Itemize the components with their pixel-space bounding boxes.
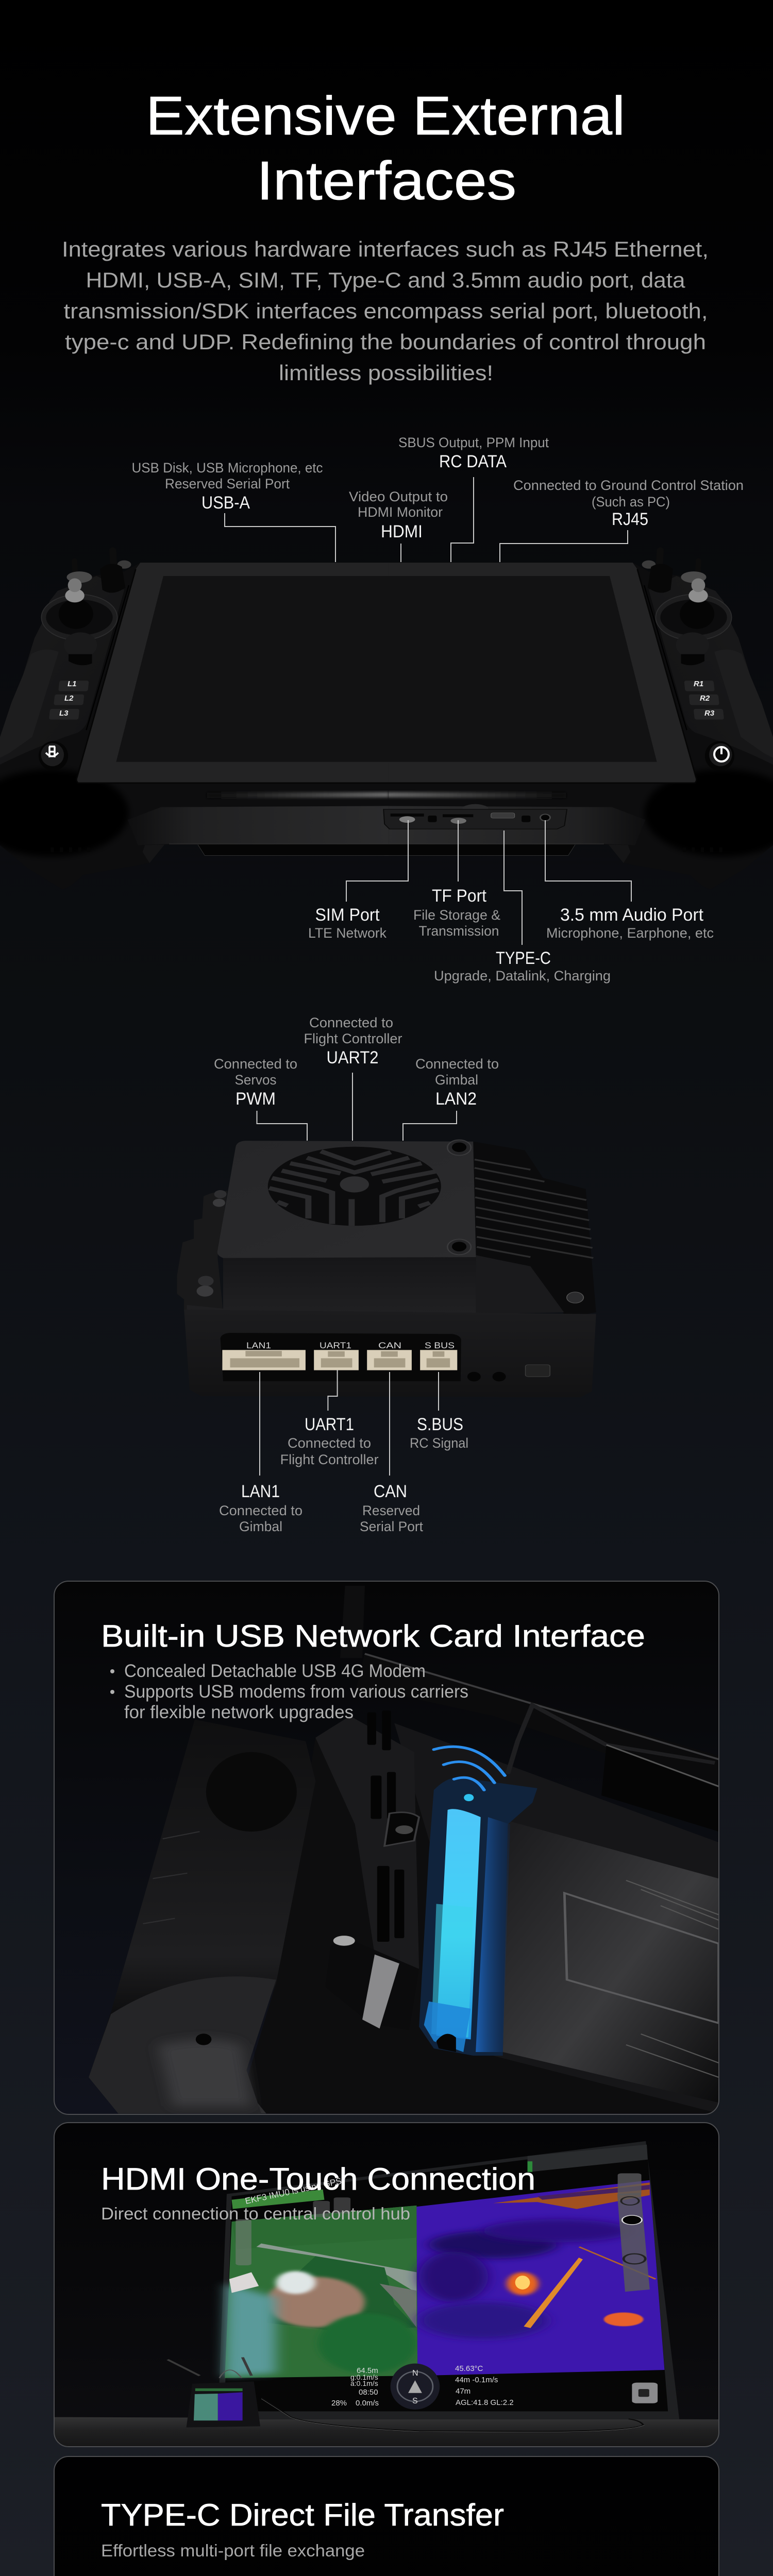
callout: TYPE-C: TYPE-C [496, 948, 551, 968]
callout: TF Port: File Storage & [413, 907, 500, 923]
callout: UART1: Connected to [288, 1435, 371, 1451]
connector labels: CAN [378, 1341, 401, 1350]
monitor HUD readouts: 47m [456, 2387, 470, 2396]
monitor HUD readouts: EKF3 IMU0 is using GPS [244, 2176, 343, 2206]
title: Extensive External [146, 86, 625, 146]
connector sockets [222, 1350, 550, 1381]
callout: TYPE-C: Upgrade, Datalink, Charging [434, 968, 611, 984]
intro paragraph: limitless possibilities! [279, 361, 493, 385]
controller button labels: L3 [59, 709, 69, 718]
panel subtext: Direct connection to central control hub [101, 2204, 410, 2223]
connector labels: S BUS [425, 1341, 455, 1350]
intro paragraph [62, 237, 709, 385]
callout: S.BUS: S.BUS [417, 1415, 463, 1434]
controller illustration [0, 547, 773, 889]
monitor HUD readouts: 0.0m/s [356, 2399, 379, 2408]
callout: HDMI [349, 489, 448, 562]
callout: HDMI: HDMI Monitor [358, 504, 443, 520]
callout: CAN [360, 1372, 423, 1534]
callout: S.BUS: RC Signal [410, 1435, 468, 1451]
callout: SIM Port: LTE Network [308, 925, 386, 941]
monitor HUD readouts: 45.63°C [455, 2364, 483, 2373]
callout: SIM Port: SIM Port [315, 905, 380, 925]
callout: HDMI: HDMI [381, 522, 423, 541]
callout: S.BUS [410, 1372, 468, 1451]
icon: home button [46, 747, 58, 757]
intro paragraph: transmission/SDK interfaces encompass serial port, bluetooth, [64, 299, 708, 323]
flight module illustration [177, 1140, 596, 1397]
controller button labels: R2 [700, 694, 710, 703]
panel heading: Built-in USB Network Card Interface [101, 1619, 645, 1653]
controller button labels: L1 [68, 680, 77, 688]
controller button labels: R3 [704, 709, 715, 718]
controller button labels: R1 [694, 680, 703, 688]
callout: LAN2: Connected to [415, 1056, 499, 1072]
callout: UART2: Connected to [309, 1015, 393, 1030]
callout: HDMI: Video Output to [349, 489, 448, 504]
callout: PWM: PWM [236, 1089, 276, 1109]
connector labels: LAN1 [246, 1341, 271, 1350]
callout: LAN2: LAN2 [435, 1089, 477, 1109]
callout: LAN1: Connected to [219, 1503, 303, 1518]
callout: CAN: CAN [374, 1482, 407, 1501]
bullet list: Concealed Detachable USB 4G Modem [124, 1661, 426, 1681]
callout: UART2 [304, 1015, 402, 1141]
intro paragraph: type-c and UDP. Redefining the boundaries of control through [65, 330, 706, 354]
monitor HUD readouts: 44m -0.1m/s [455, 2376, 498, 2384]
controller button labels [59, 680, 715, 718]
panel subtext: Effortless multi-port file exchange [101, 2541, 365, 2560]
callout: RC DATA [398, 435, 549, 562]
bullet list: for flexible network upgrades [124, 1702, 354, 1722]
title: Interfaces [257, 150, 516, 211]
callout: CAN: Serial Port [360, 1519, 423, 1534]
callout: LAN1: LAN1 [241, 1482, 280, 1501]
intro paragraph: HDMI, USB-A, SIM, TF, Type-C and 3.5mm audio port, data [86, 268, 685, 292]
callout: UART1: UART1 [305, 1415, 354, 1434]
callout: RJ45 [500, 478, 744, 562]
callout: TYPE-C [434, 831, 611, 984]
monitor HUD readouts: 28% [331, 2399, 347, 2408]
monitor HUD readouts: N [412, 2369, 418, 2378]
connector labels [246, 1341, 455, 1350]
callout: 3.5 mm Audio Port: 3.5 mm Audio Port [560, 905, 704, 925]
monitor HUD readouts: 64.5m [357, 2366, 378, 2375]
callout: USB-A [132, 460, 335, 562]
panel: USB network card [54, 1581, 719, 2114]
monitor HUD readouts: S [412, 2397, 418, 2405]
panel: TYPE-C transfer [54, 2456, 719, 2576]
callout: UART2: Flight Controller [304, 1031, 402, 1046]
controller button labels: L2 [64, 694, 74, 703]
callout: RJ45: Connected to Ground Control Station [513, 478, 744, 493]
controller left half [0, 547, 389, 889]
monitor HUD readouts: AGL:41.8 GL:2.2 [456, 2398, 514, 2407]
callout: USB-A: USB-A [201, 493, 250, 513]
module body [177, 1140, 596, 1397]
callout: LAN1: Gimbal [239, 1519, 282, 1534]
callout: USB-A: USB Disk, USB Microphone, etc [132, 460, 323, 476]
callout: LAN1 [219, 1372, 303, 1534]
callout: TF Port: TF Port [432, 886, 487, 906]
callout: CAN: Reserved [362, 1503, 420, 1518]
controller right half [384, 547, 773, 889]
monitor HUD readouts: g:0.1m/s [350, 2373, 378, 2381]
panel: HDMI connection [54, 2123, 719, 2447]
callout: RJ45: RJ45 [612, 510, 648, 529]
callout: UART2: UART2 [327, 1048, 378, 1067]
callout: LAN2: Gimbal [435, 1072, 478, 1088]
callout: TF Port: Transmission [418, 923, 499, 939]
callout: 3.5 mm Audio Port [545, 820, 714, 941]
callout: PWM [214, 1056, 307, 1141]
callout: UART1 [280, 1370, 379, 1467]
callout: RC DATA: SBUS Output, PPM Input [398, 435, 549, 450]
USB scene illustration [89, 1586, 719, 2113]
callout: RJ45: (Such as PC) [592, 494, 670, 510]
title [146, 86, 625, 211]
intro paragraph: Integrates various hardware interfaces such as RJ45 Ethernet, [62, 237, 709, 261]
monitor HUD readouts: 08:50 [359, 2388, 378, 2397]
callout: LAN2 [403, 1056, 499, 1141]
monitor scene illustration [54, 2141, 719, 2447]
port strip [383, 804, 567, 829]
callout: TF Port [413, 820, 500, 939]
callout: UART1: Flight Controller [280, 1452, 379, 1467]
connector labels: UART1 [320, 1341, 351, 1350]
panel heading: HDMI One-Touch Connection [101, 2162, 535, 2196]
callout: 3.5 mm Audio Port: Microphone, Earphone, etc [546, 925, 714, 941]
callout: PWM: Connected to [214, 1056, 297, 1072]
bullet list [110, 1661, 468, 1722]
monitor HUD readouts: a:0.1m/s [350, 2379, 378, 2387]
callout: RC DATA: RC DATA [439, 452, 507, 471]
panel heading: TYPE-C Direct File Transfer [101, 2498, 504, 2532]
bullet list: Supports USB modems from various carriers [124, 1682, 468, 1702]
callout: USB-A: Reserved Serial Port [165, 476, 290, 492]
monitor HUD readouts [244, 2176, 514, 2408]
callout: SIM Port [308, 820, 408, 941]
icon: power button [714, 747, 729, 761]
callout: PWM: Servos [235, 1072, 276, 1088]
